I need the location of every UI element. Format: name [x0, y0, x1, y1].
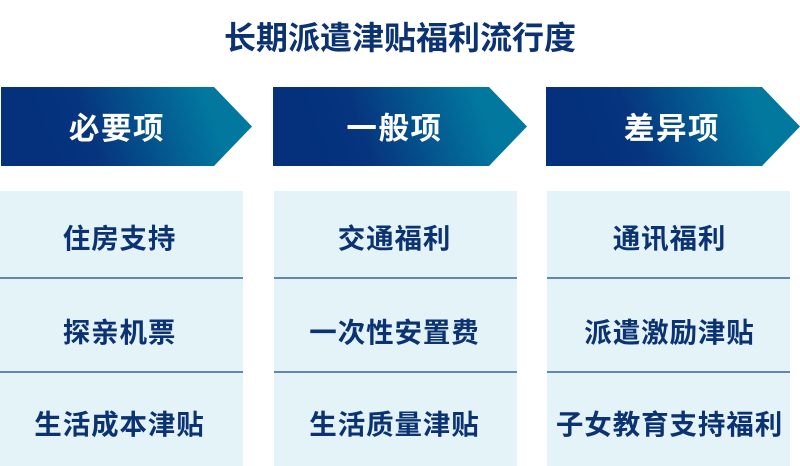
- arrow header: 一般项: 一般项: [346, 112, 443, 146]
- item: 住房支持: 住房支持: [63, 223, 176, 254]
- arrow header: 一般项: [273, 87, 527, 166]
- item: 交通福利: 交通福利: [338, 223, 451, 254]
- arrow header: 差异项: 差异项: [624, 112, 720, 146]
- arrow header: 差异项: [546, 87, 800, 166]
- item: 生活质量津贴: 生活质量津贴: [309, 409, 480, 440]
- item: 生活成本津贴: 生活成本津贴: [34, 409, 205, 440]
- title: 长期派遣津贴福利流行度: [224, 20, 576, 56]
- panel: 差异项 list: [547, 191, 790, 466]
- panel: 必要项 list: [0, 191, 243, 466]
- item: 子女教育支持福利: 子女教育支持福利: [556, 409, 783, 440]
- arrow header: 必要项: 必要项: [69, 112, 165, 146]
- item: 通讯福利: 通讯福利: [613, 223, 726, 254]
- item: 一次性安置费: 一次性安置费: [309, 317, 480, 348]
- item: 探亲机票: 探亲机票: [63, 317, 176, 348]
- arrow header: 必要项: [1, 87, 252, 166]
- item: 派遣激励津贴: 派遣激励津贴: [584, 317, 755, 348]
- panel: 一般项 list: [274, 191, 517, 466]
